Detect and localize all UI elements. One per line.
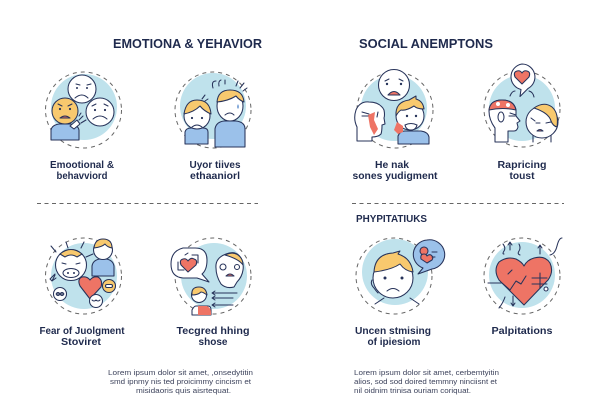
label line 2: sones yudigment <box>352 170 438 182</box>
label: targeted: Tecgred hhing <box>176 325 250 337</box>
label line 2: shose <box>198 336 228 348</box>
text block: right paragraph <box>354 368 499 395</box>
text block: left paragraph <box>108 368 253 395</box>
label: he nak: He nak <box>375 159 409 171</box>
label line 2: toust <box>510 170 535 182</box>
title: social assumptions: SOCIAL ANEMPTONS <box>359 36 493 51</box>
label: your lives: Uyor tiives <box>190 159 241 171</box>
label line 2: ethaaniorl <box>190 170 240 182</box>
icon: head and sad faces <box>355 70 433 148</box>
label line 2: Stoviret <box>61 336 102 348</box>
label: fear of judgment: Fear of Juolgment <box>40 325 125 337</box>
label: repricing: Rapricing <box>498 159 546 171</box>
title: emotional and behavior: EMOTIONA & YEHAVIOR <box>113 36 263 51</box>
icon: speech bubble, face and arrows <box>171 238 251 315</box>
divider left <box>37 202 258 204</box>
text block: left paragraph: misidaoris quis aisrtequat. <box>136 386 231 395</box>
icon: child and adult <box>175 72 251 148</box>
text block: right paragraph: nil oidnim trinisa ouriam coriquat. <box>354 386 471 395</box>
icon: heart bubble and profiles <box>484 64 560 147</box>
text block: right paragraph: Lorem ipsum dolor sit amet, cerbemtyitin <box>354 368 499 377</box>
text block: right paragraph: alios, sod sod doired temmny ninciisnt et <box>354 377 498 386</box>
text block: left paragraph: smd ipnmy nis ted proicimmy cincism et <box>110 377 252 386</box>
icon: fear of judgment <box>46 238 122 314</box>
label line 2: behavviord <box>56 170 108 182</box>
label line 2: of ipiesiom <box>368 336 420 348</box>
icon: worried face with bubble <box>356 238 445 314</box>
label: palpitations: Palpitations <box>492 325 553 337</box>
icon: heart with pulse <box>484 238 562 314</box>
heading: physical: PHYPITATIUKS <box>356 213 427 225</box>
label: uncen: Uncen stmising <box>355 325 431 337</box>
icon: three emotional faces <box>46 72 122 148</box>
text block: left paragraph: Lorem ipsum dolor sit amet, ,onsedytitin <box>108 368 253 377</box>
label: emotional and behavioral: Emootional & <box>50 159 114 171</box>
divider right <box>352 202 564 204</box>
